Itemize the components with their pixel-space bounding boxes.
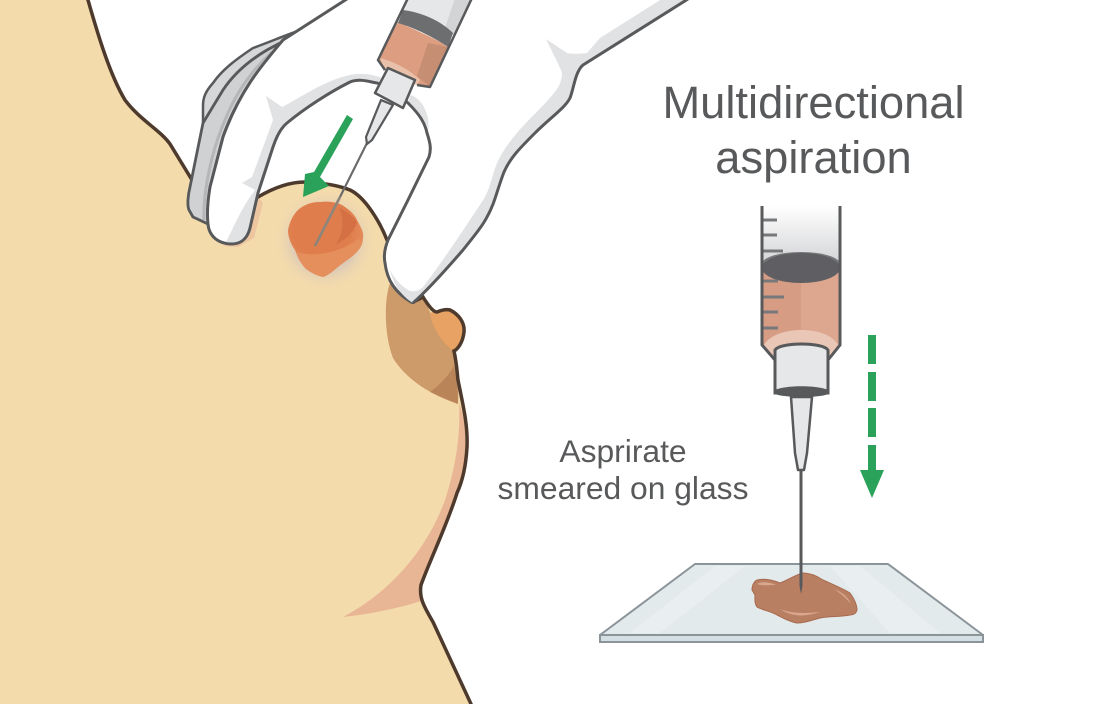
tip [366, 100, 393, 144]
scale [762, 220, 784, 328]
finger side [188, 27, 310, 224]
folded fingers [203, 27, 310, 123]
left glove [188, 0, 692, 303]
body shadow [343, 402, 467, 617]
barrel outline [378, 0, 472, 87]
main syringe and needle [315, 0, 472, 246]
liquid [378, 22, 448, 87]
tip [791, 397, 812, 470]
areola shade [430, 366, 458, 404]
finger shadow on skin [222, 197, 263, 247]
aspiration syringe [762, 206, 840, 594]
caption: smeared on glass [498, 470, 748, 506]
areola [386, 283, 458, 404]
nipple [430, 309, 464, 351]
caption [498, 433, 748, 506]
glove shading [226, 74, 408, 243]
body outline [88, 0, 471, 704]
tumor [273, 188, 377, 292]
green dashed arrow [860, 335, 884, 498]
heading: aspiration [715, 132, 912, 183]
smear highlights [757, 582, 851, 615]
caption: Asprirate [559, 433, 687, 469]
hub [375, 68, 415, 108]
body silhouette [0, 0, 471, 704]
plunger [762, 252, 840, 276]
right glove outline [413, 0, 688, 303]
glass slide [600, 564, 983, 642]
hub [775, 344, 828, 393]
green arrow into tumor [303, 115, 353, 197]
barrel air [762, 206, 840, 268]
right glove shading [390, 0, 692, 303]
needle [340, 143, 367, 197]
needle [800, 468, 802, 594]
glass highlights [630, 566, 940, 633]
right glove [390, 0, 692, 303]
glove body [207, 0, 692, 303]
heading [662, 77, 965, 183]
barrel top [403, 0, 472, 35]
smear [752, 573, 857, 623]
heading: Multidirectional [662, 77, 965, 128]
barrel walls [762, 206, 840, 360]
liquid [762, 267, 840, 360]
glove outline [207, 0, 430, 303]
thumb shading [408, 95, 429, 130]
plunger band [398, 10, 453, 47]
